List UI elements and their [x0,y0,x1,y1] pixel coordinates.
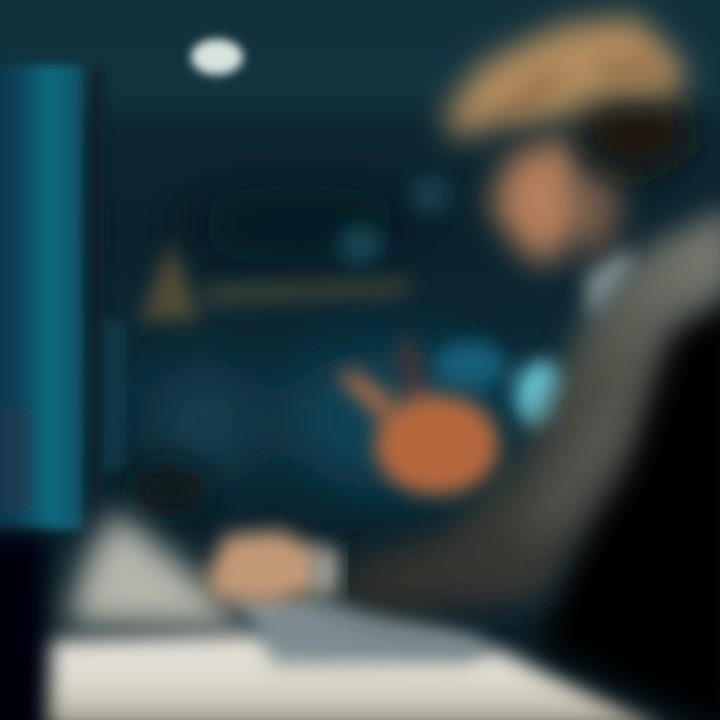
background glow: teal mid-room [155,203,500,490]
ceiling light [191,39,243,75]
person: suit and arm [205,15,720,720]
shirt cuff [312,548,338,594]
keyboard [230,590,490,664]
papers on desk [65,510,250,630]
background: blurred amber chart line [140,240,410,320]
suit: lighter sleeve fold [520,380,630,540]
suit: grey shoulder and sleeve [335,205,720,615]
desk surface [48,632,670,720]
hair: dark underside [575,95,690,180]
raised hand [338,340,499,495]
face [490,135,585,268]
hair: blond top [445,15,685,140]
hair: darker strands [490,50,670,120]
blue glow: screen highlights [338,175,570,429]
shirt collar [585,248,635,320]
monitor stand: black lower left [0,535,45,720]
suit: dark lower body [540,280,720,720]
dark object behind desk [130,464,210,516]
neck [565,170,620,270]
monitor on left [0,65,126,530]
hand on keyboard [205,530,320,605]
